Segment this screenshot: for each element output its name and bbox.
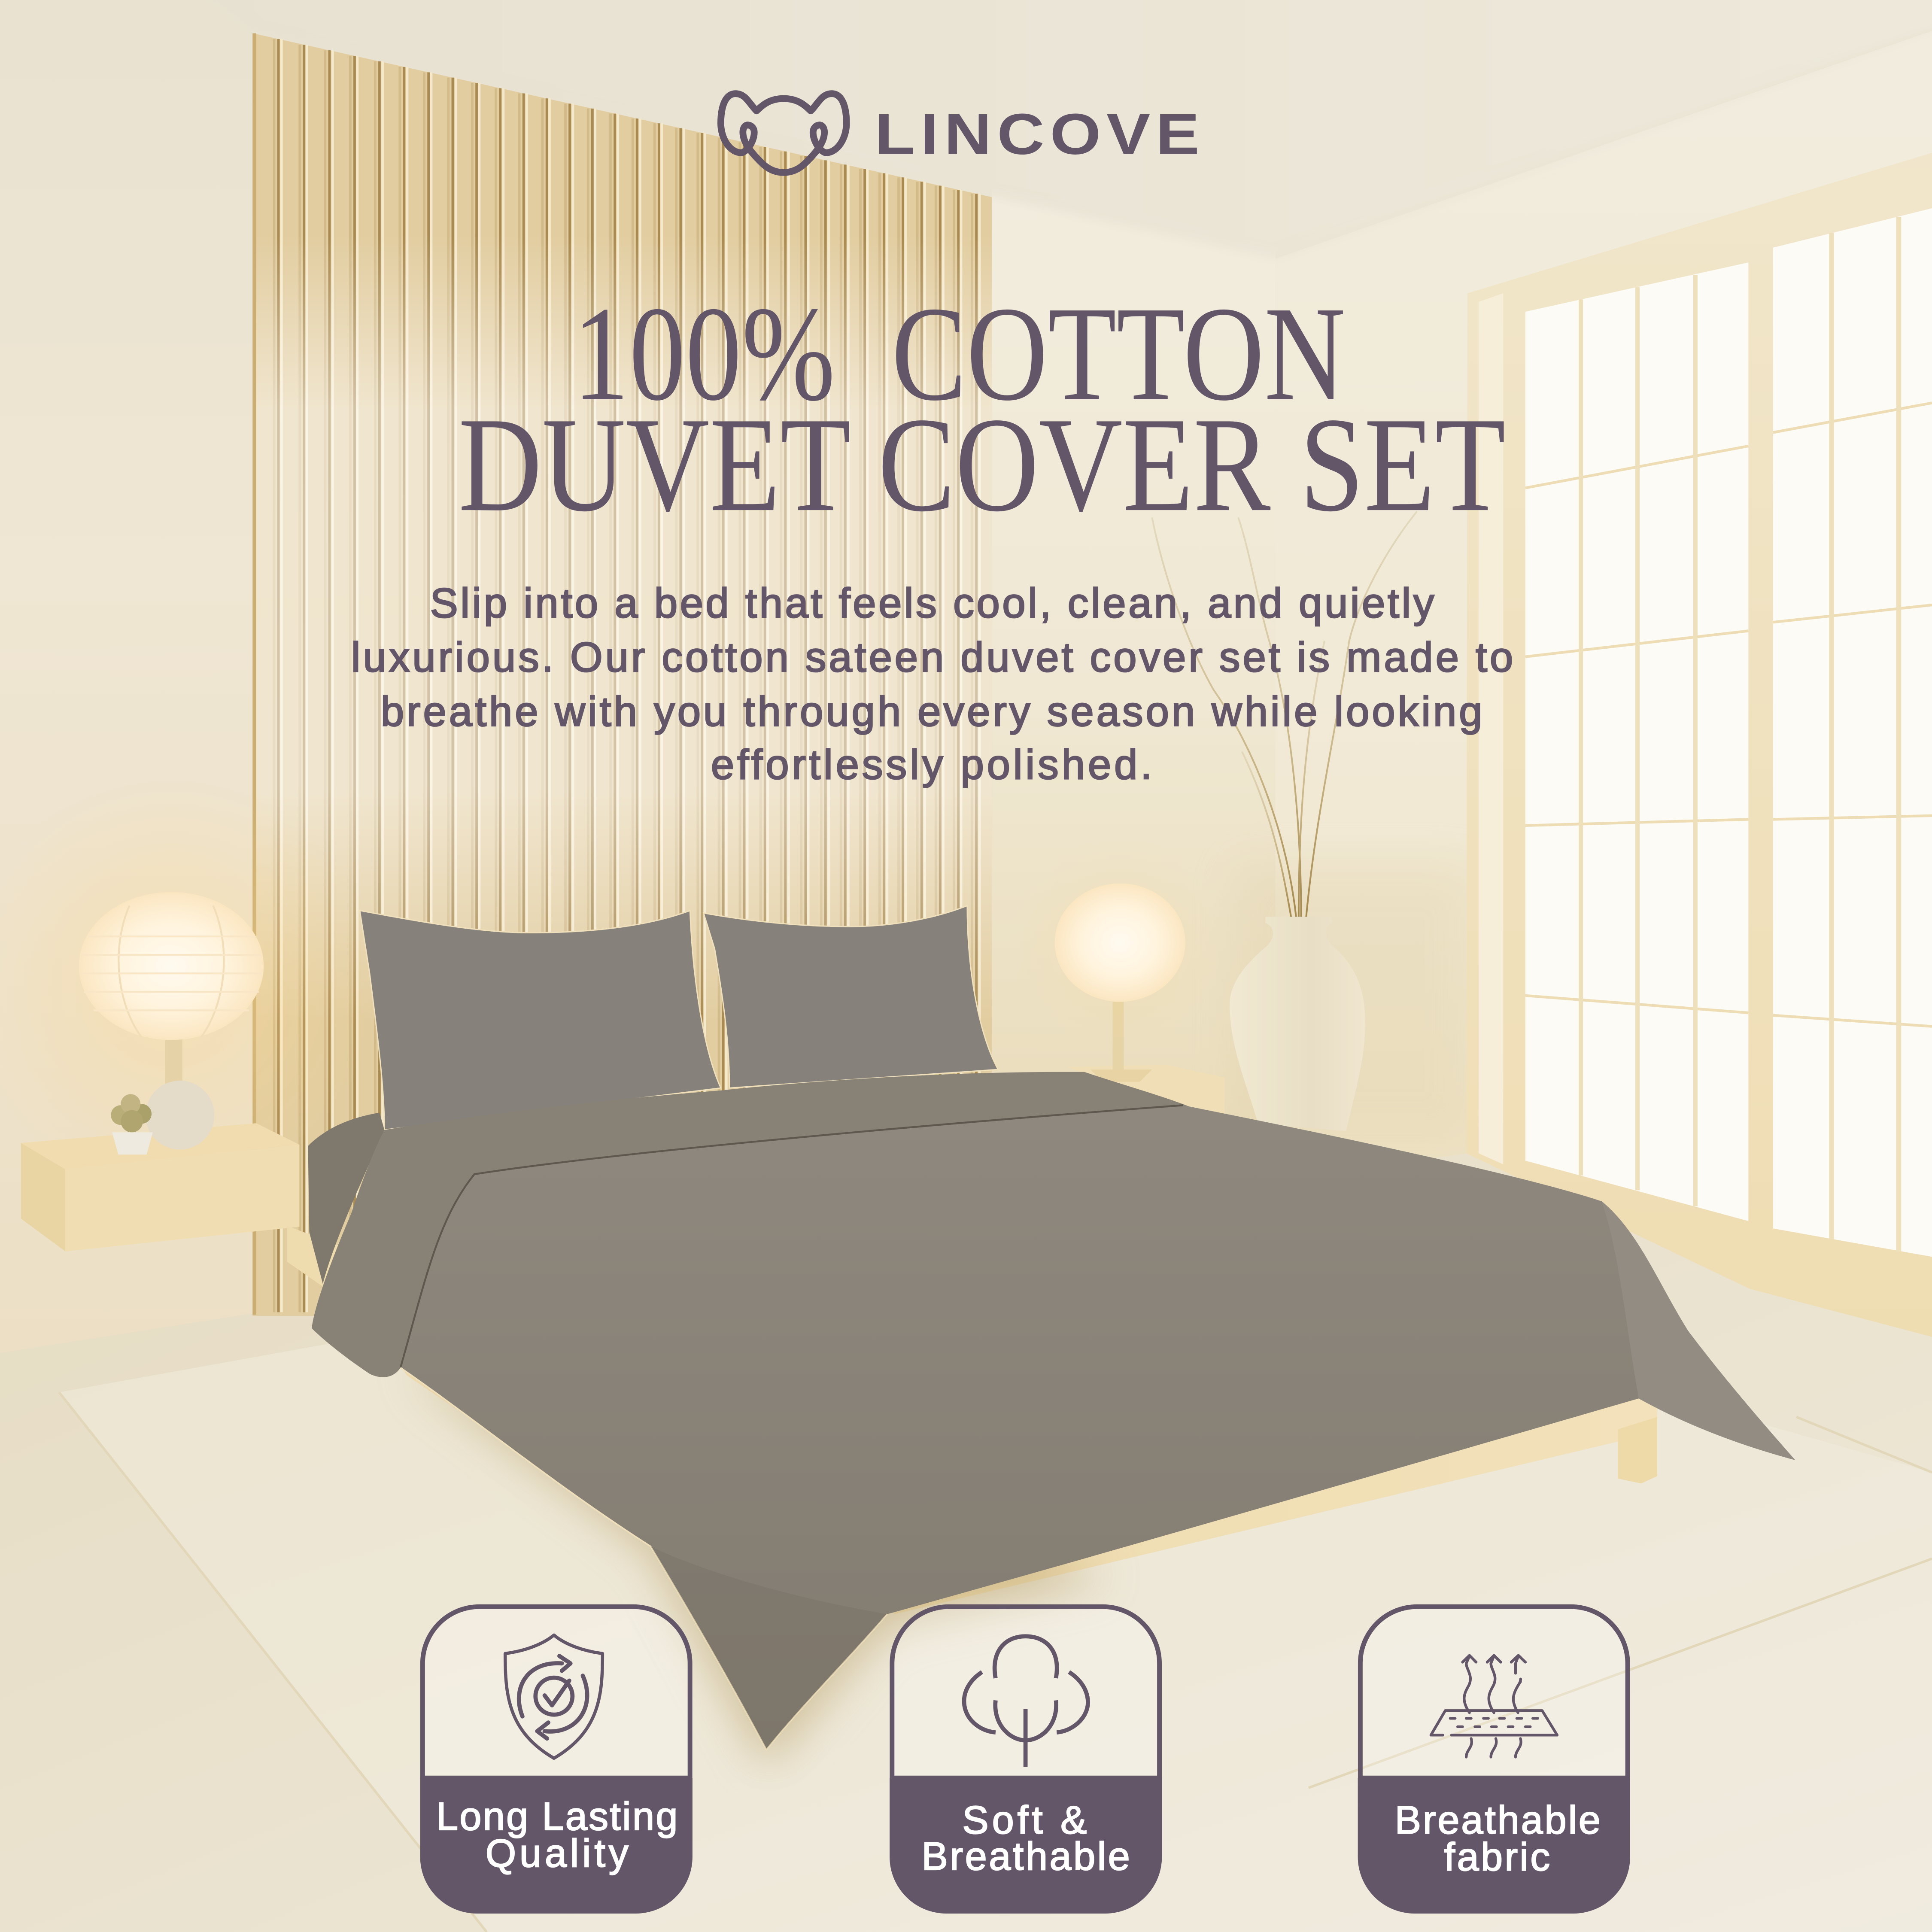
description paragraph: effortlessly polished. [711, 741, 1152, 788]
label: Quality [486, 1832, 629, 1875]
left floating nightstand [21, 1123, 299, 1252]
bed frame [287, 1226, 1657, 1614]
pillow right [704, 905, 998, 1088]
label: Long Lasting [436, 1795, 677, 1838]
floor vase [1230, 917, 1365, 1131]
description paragraph: breathe with you through every season while looking [381, 688, 1482, 735]
floor and rug [0, 1152, 1932, 1932]
title line 2: DUVET COVER SET [459, 390, 1506, 540]
label: fabric [1444, 1835, 1550, 1879]
description paragraph: Slip into a bed that feels cool, clean, and quietly [430, 580, 1434, 626]
icon: airflow through fabric [1431, 1656, 1557, 1757]
label [436, 1795, 677, 1875]
right window panel [1773, 208, 1932, 1257]
dried branches [1152, 511, 1417, 918]
label: Breathable [1395, 1798, 1601, 1842]
window: shoji sliding panels [1466, 153, 1932, 1337]
title line 1: 100% COTTON [573, 279, 1346, 429]
logo wordmark: LINCOVE [875, 102, 1205, 167]
icon: cotton boll [964, 1636, 1088, 1767]
logo mark: bear head outline [721, 94, 847, 173]
fitted sheet [308, 1113, 384, 1284]
slatted wood wall panel [252, 33, 992, 1316]
logo [721, 94, 1205, 173]
small potted plant [111, 1094, 153, 1154]
right nightstand and lamp [1009, 838, 1231, 1115]
badge: breathable fabric [1358, 1607, 1630, 1914]
label: Soft & [962, 1798, 1087, 1842]
label [1395, 1798, 1601, 1879]
description paragraph [351, 580, 1513, 788]
label [922, 1798, 1130, 1878]
title [459, 279, 1506, 540]
left table lamp [79, 892, 264, 1150]
left window panel [1525, 262, 1748, 1221]
duvet folded band [312, 1072, 1189, 1377]
duvet main [401, 1105, 1795, 1750]
label: Breathable [922, 1835, 1130, 1878]
badge: soft and breathable [890, 1607, 1162, 1914]
left lamp glow [0, 776, 381, 1195]
icon: shield with check [505, 1635, 602, 1758]
pillow left [360, 911, 721, 1130]
floor shadow around duvet [407, 1368, 1109, 1768]
badge: long lasting quality [420, 1607, 693, 1914]
description paragraph: luxurious. Our cotton sateen duvet cover set is made to [351, 634, 1513, 680]
